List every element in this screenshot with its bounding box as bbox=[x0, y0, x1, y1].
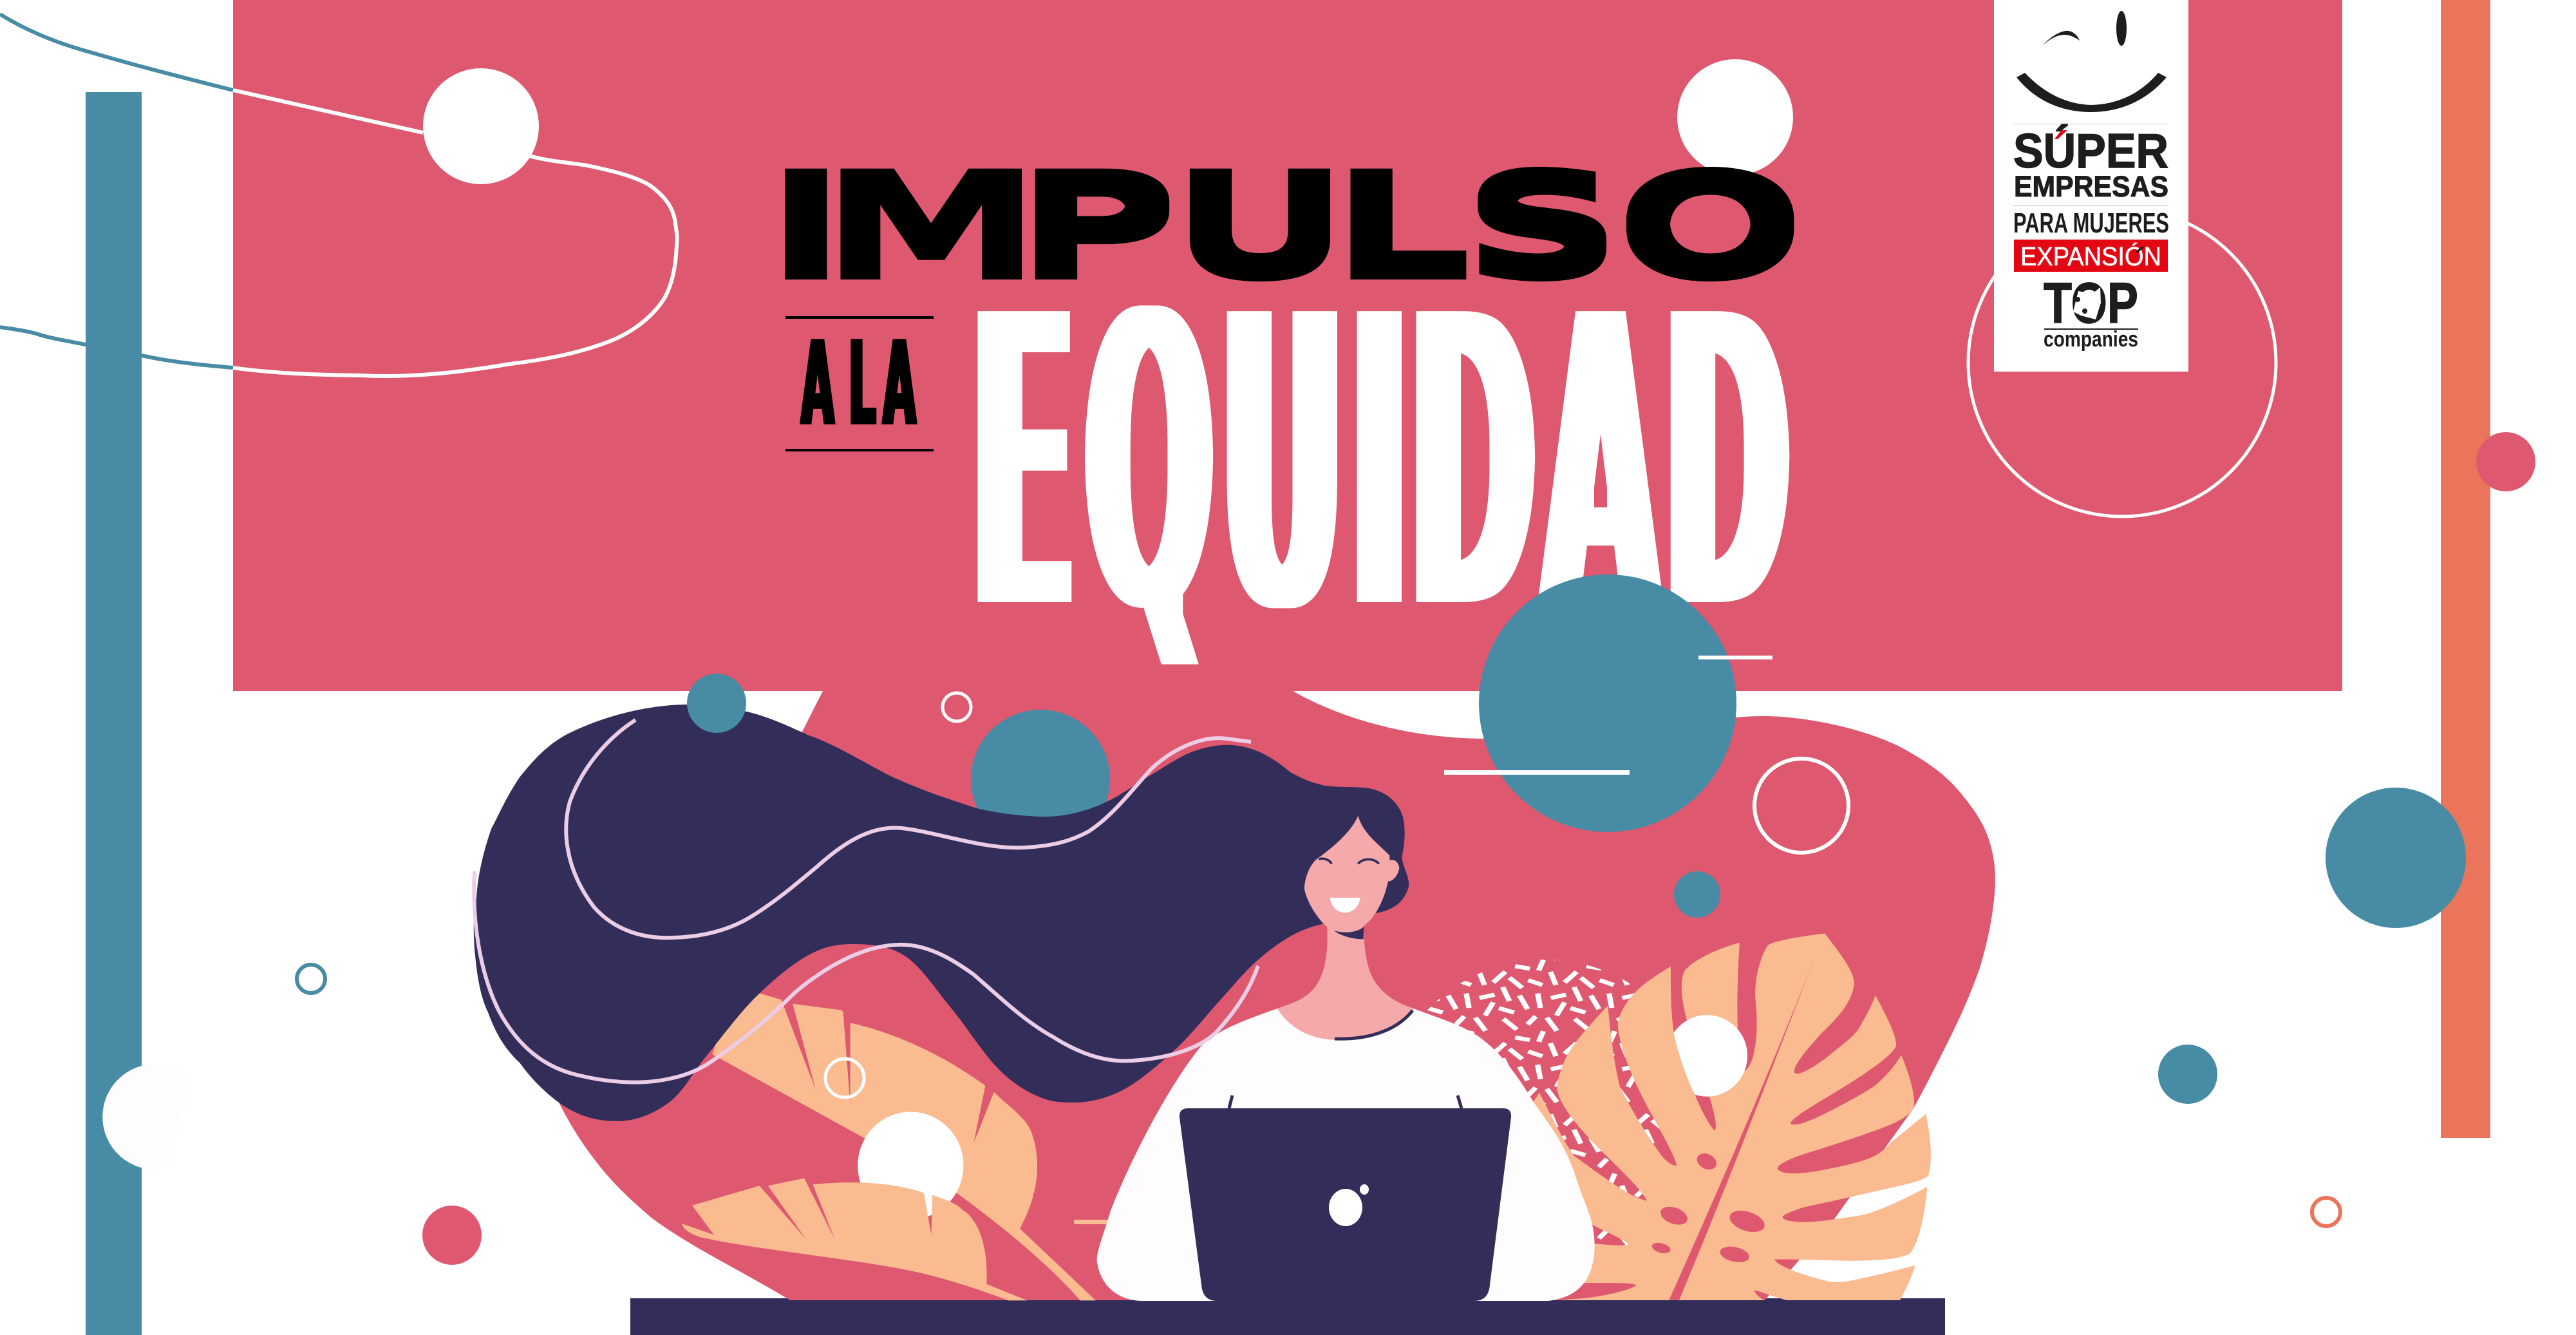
back leaf bbox=[712, 987, 1096, 1300]
leaf holes bbox=[1650, 1151, 1769, 1265]
thin white curve across header bbox=[233, 90, 677, 376]
neckline bbox=[1335, 1010, 1413, 1039]
orange ring right bbox=[2312, 1198, 2340, 1226]
title: A LA with rules: A LA bbox=[802, 316, 916, 453]
woman's hair bbox=[474, 705, 1409, 1121]
face shape and ear bbox=[1304, 816, 1399, 933]
white ring on blob bbox=[1754, 759, 1848, 853]
title: EQUIDAD: EQUIDAD bbox=[972, 216, 1789, 712]
pink header panel bbox=[233, 0, 2342, 691]
icon: winking smiley bbox=[2017, 11, 2167, 112]
white circle top centre bbox=[1677, 59, 1793, 175]
badge: Súper Empresas para Mujeres bbox=[1994, 0, 2188, 372]
laptop logo bbox=[1329, 1184, 1369, 1226]
monstera leaf right bbox=[1532, 934, 1931, 1300]
small teal circle right bbox=[2158, 1045, 2217, 1104]
icon: puzzle piece in the O bbox=[2073, 287, 2101, 319]
teal ring left bbox=[297, 965, 325, 993]
lilac hair strand lower bbox=[474, 871, 1258, 1083]
orange vertical bar bbox=[2441, 0, 2490, 1138]
smile bbox=[1330, 898, 1360, 913]
neck bbox=[1277, 924, 1414, 1040]
white circle on teal bar bbox=[102, 1064, 193, 1169]
lilac hair strand upper bbox=[566, 720, 1251, 938]
small white ring on leaf bbox=[825, 1059, 864, 1097]
desk bbox=[630, 1298, 1945, 1335]
pink circle on orange bar bbox=[2476, 432, 2535, 491]
badge: Súper Empresas para Mujeres: PARA MUJERES bbox=[2013, 207, 2169, 239]
white circle on monstera bbox=[1667, 1015, 1747, 1097]
monstera silhouette bbox=[1532, 934, 1931, 1300]
pink circle left bbox=[422, 1206, 482, 1265]
white circle between leaves bbox=[858, 1112, 963, 1219]
white circle top left bbox=[423, 68, 539, 184]
tropical leaves left bbox=[682, 987, 1096, 1300]
teal circle on hair bbox=[687, 674, 746, 733]
badge: Súper Empresas para Mujeres: SÚPER bbox=[2013, 124, 2168, 178]
woman's sweater bbox=[1097, 1008, 1595, 1301]
lobe patch over circle bbox=[1632, 967, 1696, 1097]
badge: Súper Empresas para Mujeres: TOP bbox=[2044, 270, 2138, 335]
front leaf bbox=[682, 1178, 1028, 1300]
short white dash on teal circle bbox=[1698, 656, 1772, 659]
midrib bbox=[1669, 955, 1816, 1300]
thin curve top left, teal part bbox=[0, 14, 233, 90]
face bbox=[1304, 816, 1399, 939]
teal vertical bar bbox=[86, 92, 142, 1335]
badge: Súper Empresas para Mujeres: companies bbox=[2044, 327, 2138, 352]
small white ring top bbox=[943, 693, 971, 721]
long white dash bbox=[1444, 770, 1630, 775]
small teal circle on blob bbox=[1674, 871, 1720, 918]
pink blob background bbox=[559, 691, 1995, 1300]
teal circle behind hair bbox=[971, 710, 1110, 849]
closed eyes bbox=[1319, 858, 1379, 864]
leaf lobe behind the circle bbox=[1682, 942, 1740, 1034]
badge: Súper Empresas para Mujeres: EXPANSIÓN bbox=[2020, 241, 2161, 271]
dotted tick pattern circle bbox=[1377, 889, 1686, 1245]
chin shadow bbox=[1334, 927, 1364, 939]
title: IMPULSO: IMPULSO bbox=[764, 146, 1805, 308]
large white ring behind badge bbox=[1968, 209, 2276, 516]
thin curve bottom left, teal part bbox=[0, 327, 233, 368]
orange dash bbox=[1074, 1220, 1147, 1224]
laptop bbox=[1180, 1095, 1511, 1301]
large teal circle bbox=[1479, 574, 1736, 832]
large teal circle right bbox=[2326, 788, 2466, 928]
badge: Súper Empresas para Mujeres: EMPRESAS bbox=[2014, 170, 2168, 203]
